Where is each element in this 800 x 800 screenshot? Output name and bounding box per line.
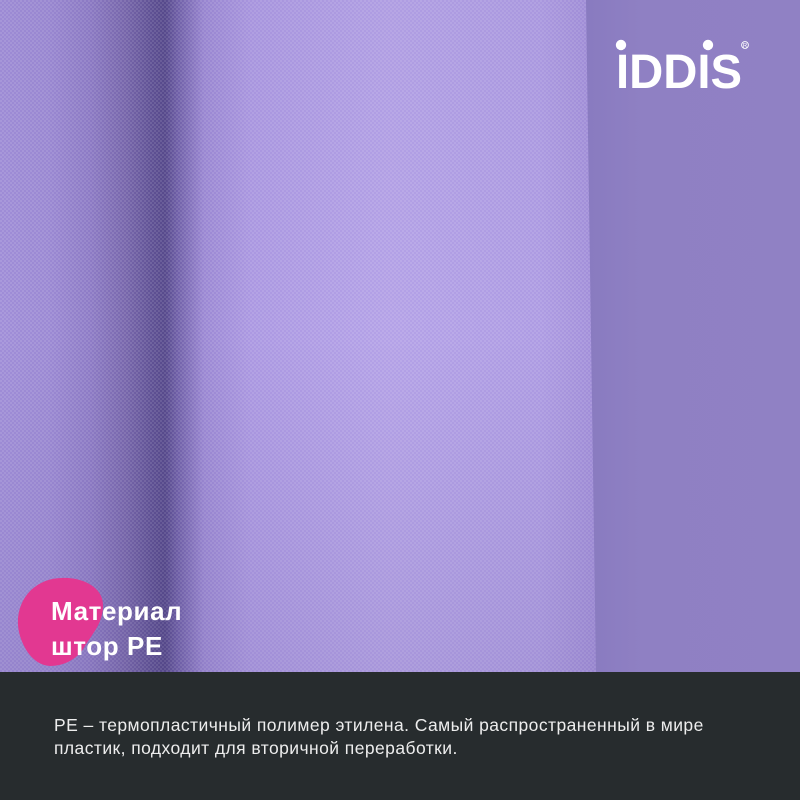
heading bbox=[51, 596, 182, 661]
panel: description footer bbox=[0, 672, 800, 800]
text block: description: пластик, подходит для вторичной переработки. bbox=[54, 738, 458, 758]
logo: IDDIS: R bbox=[743, 43, 748, 49]
icon: pink blob bbox=[18, 578, 103, 666]
text block: description bbox=[54, 715, 704, 758]
heading: штор PE bbox=[51, 631, 163, 661]
heading: Материал bbox=[51, 596, 182, 626]
text block: description: PE – термопластичный полимер этилена. Самый распространенный в мире bbox=[54, 715, 704, 735]
logo: IDDIS: IDDIS bbox=[616, 46, 742, 99]
